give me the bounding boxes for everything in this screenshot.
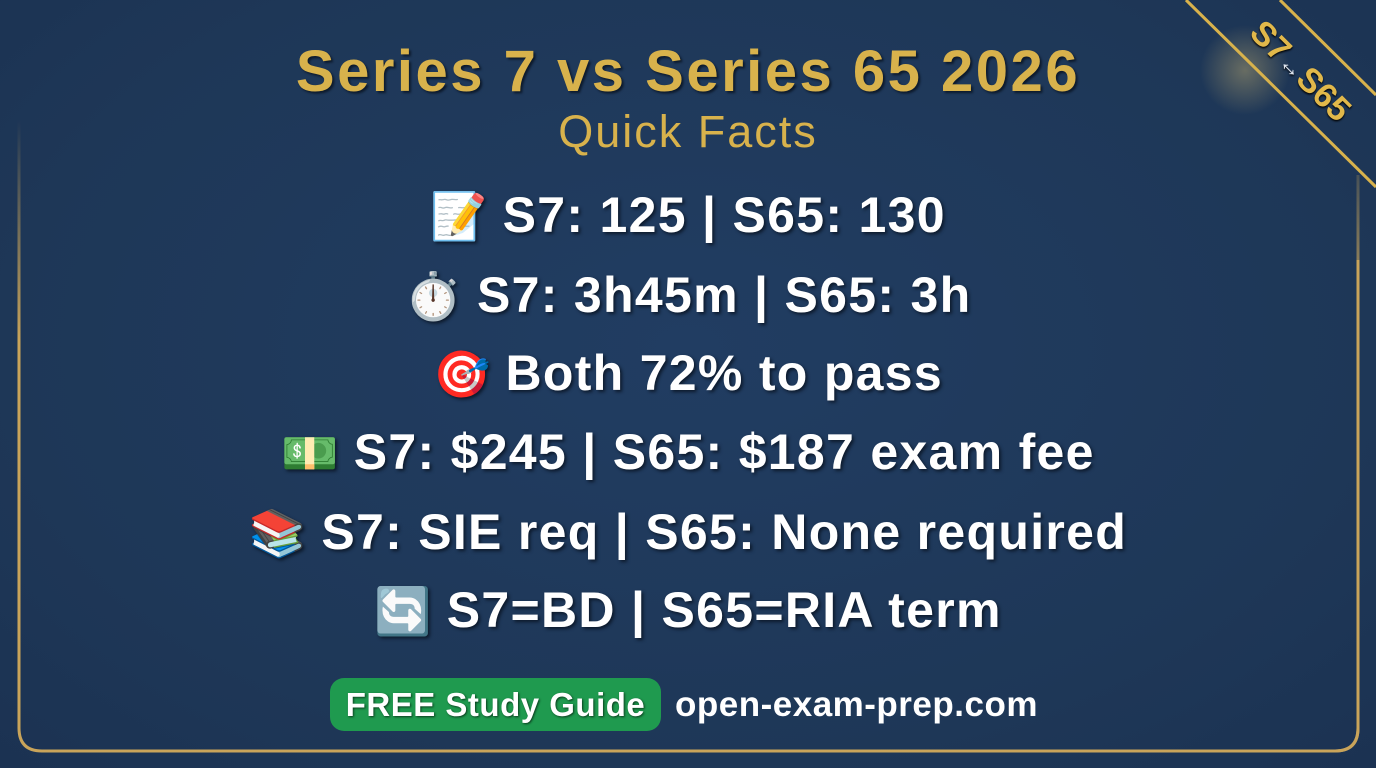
title: Series 7 vs Series 65 2026 — [296, 39, 1080, 104]
corner ribbon label: S7↔S65 — [1242, 13, 1358, 129]
fact: exam fee: 💵 S7: $245 | S65: $187 exam fee — [281, 424, 1095, 480]
fact: prerequisite: 📚 S7: SIE req | S65: None required — [249, 504, 1127, 560]
subtitle: Quick Facts — [558, 106, 818, 157]
url: open-exam-prep.com — [675, 685, 1038, 724]
badge — [330, 678, 661, 731]
fact: time: ⏱️ S7: 3h45m | S65: 3h — [405, 267, 971, 323]
badge: FREE Study Guide — [346, 686, 645, 723]
fact: registration: 🔄 S7=BD | S65=RIA term — [374, 582, 1002, 638]
footer: study guide badge and url — [330, 678, 1038, 731]
fact: questions: 📝 S7: 125 | S65: 130 — [430, 187, 946, 243]
fact: passing score: 🎯 Both 72% to pass — [433, 345, 943, 401]
